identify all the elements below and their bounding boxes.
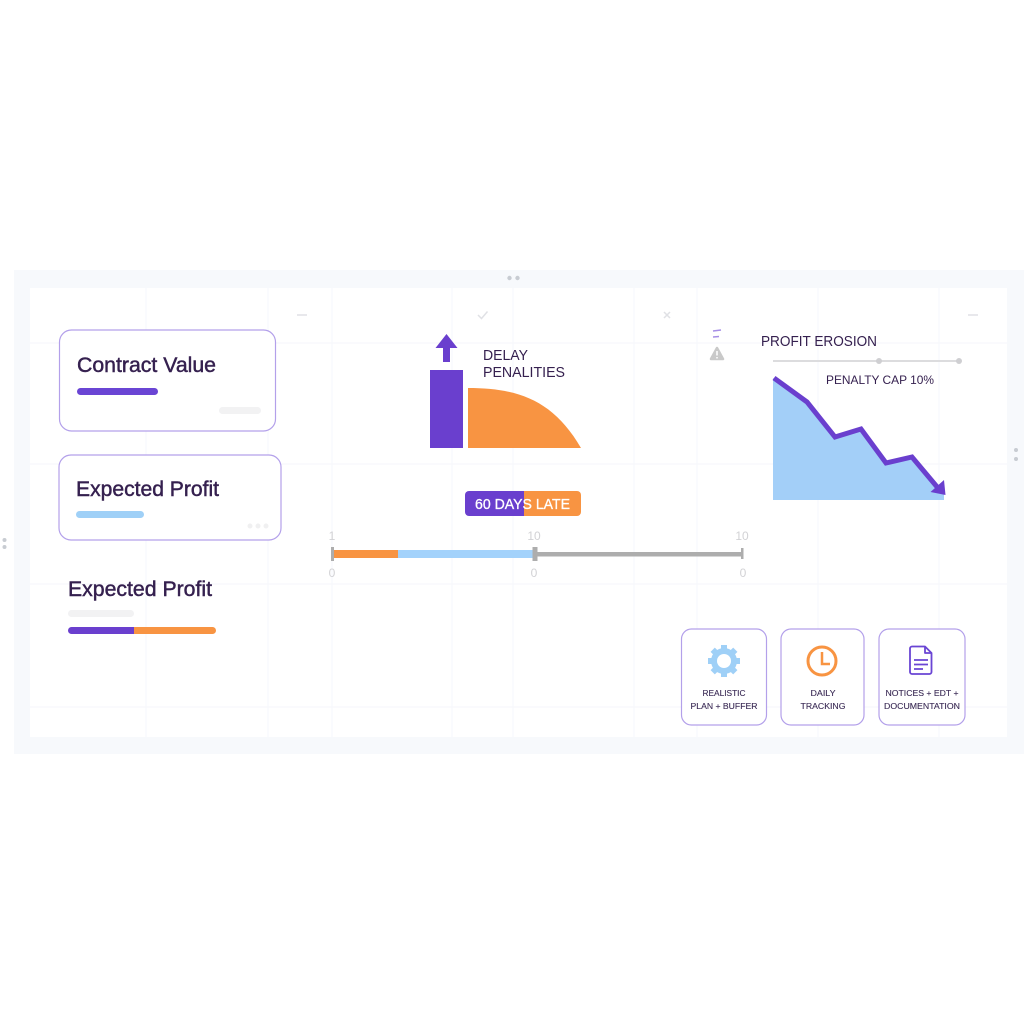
cap scale line [773, 358, 962, 364]
label: penalty cap: PENALTY CAP 10% [826, 373, 934, 387]
heading: contract value: Contract Value [77, 354, 216, 377]
timeline: 0 [329, 566, 336, 580]
timeline: 0 [740, 566, 747, 580]
block: expected profit, split bar [68, 578, 216, 634]
chart: delay penalties [430, 334, 581, 448]
badge: 60 days late [465, 491, 581, 516]
timeline: 0 [531, 566, 538, 580]
icon: clock [808, 647, 836, 675]
timeline: 10 [527, 529, 541, 543]
dots [248, 524, 268, 528]
timeline [329, 529, 749, 580]
timeline: 10 [735, 529, 749, 543]
background frame [14, 270, 1024, 754]
card: realistic plan + buffer [682, 629, 766, 725]
icon: gear [708, 645, 740, 677]
card: notices + edt + documentation: NOTICES + EDT + [886, 688, 959, 698]
split bar [68, 627, 216, 634]
placeholder pill [219, 407, 261, 414]
card: daily tracking: TRACKING [800, 701, 846, 711]
purple bar [430, 370, 463, 448]
chart: profit erosion [761, 333, 962, 500]
badge: 60 days late: 60 DAYS LATE [475, 496, 570, 513]
card: daily tracking [781, 629, 864, 725]
label: delay penalties: DELAY [483, 347, 528, 364]
orange curve area [468, 388, 581, 448]
label: delay penalties: PENALITIES [483, 364, 565, 381]
bar: expected profit [76, 511, 144, 518]
card: contract value [60, 330, 276, 431]
heading: expected profit: Expected Profit [76, 478, 219, 501]
placeholder bar [68, 610, 134, 617]
inner canvas [30, 288, 1007, 737]
heading: second expected profit: Expected Profit [68, 578, 212, 601]
icon: warning [711, 330, 723, 359]
bar: contract value [77, 388, 158, 395]
heading: profit erosion: PROFIT EROSION [761, 333, 877, 350]
timeline: 1 [329, 529, 336, 543]
icon: document [910, 646, 932, 674]
declining arrow line [774, 378, 946, 495]
card: realistic plan + buffer: PLAN + BUFFER [690, 701, 758, 711]
card: expected profit [59, 455, 281, 540]
card: notices + edt + documentation: DOCUMENTATION [884, 701, 960, 711]
area [773, 378, 944, 500]
icon: up arrow [436, 334, 458, 362]
card: realistic plan + buffer: REALISTIC [702, 688, 746, 698]
label: delay penalties [483, 347, 565, 381]
card: daily tracking: DAILY [810, 688, 836, 698]
card: notices + edt + documentation [879, 629, 965, 725]
